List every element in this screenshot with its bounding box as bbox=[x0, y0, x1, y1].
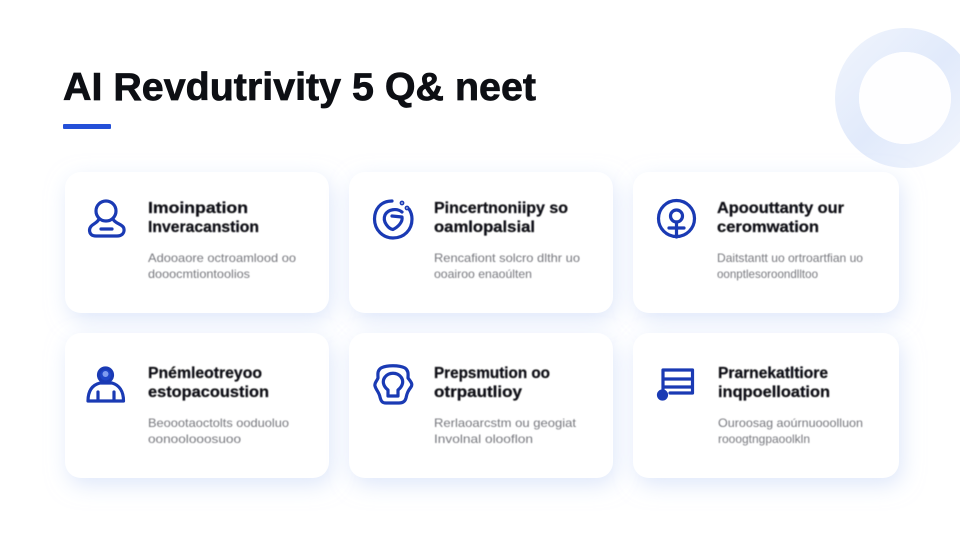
card 3 heading bbox=[717, 200, 844, 236]
card 3 text: Daitstantt uo ortroartfian uo bbox=[717, 251, 863, 265]
card 3 heading: Apoouttanty our bbox=[717, 200, 844, 217]
card 5 heading: Prepsmution oo bbox=[434, 365, 550, 382]
card 6 heading: inqpoelloation bbox=[718, 384, 830, 401]
card 4 text: oonoolooosuoo bbox=[148, 432, 241, 446]
card 6 text: Ouroosag aoúrnuooolluon bbox=[718, 416, 863, 430]
card 5 text bbox=[434, 416, 577, 446]
panel: card 5 bbox=[349, 333, 613, 478]
card 1 text bbox=[148, 251, 296, 281]
card 4 text: Beoootaoctolts ooduoluo bbox=[148, 416, 289, 430]
card 1 text: dooocmtiontoolios bbox=[148, 267, 250, 281]
icon: spiral bbox=[374, 201, 412, 238]
icon: document list bbox=[658, 370, 692, 399]
panel: card 1 bbox=[65, 172, 329, 313]
card 2 text: ooairoo enaoúlten bbox=[434, 267, 532, 281]
card 6 text: rooogtngpaoolkln bbox=[718, 432, 810, 446]
card 1 text: Adooaore octroamlood oo bbox=[148, 251, 296, 265]
card 3 text: oonptlesoroondlltoo bbox=[717, 267, 818, 281]
card 2 heading bbox=[434, 200, 568, 236]
card 4 text bbox=[148, 416, 289, 446]
card 6 heading bbox=[718, 365, 830, 401]
card 5 text: Involnal olooflon bbox=[434, 432, 533, 446]
card 1 heading: Imoinpation bbox=[148, 200, 248, 217]
card 5 text: Rerlaoarcstm ou geogiat bbox=[434, 416, 577, 430]
card 2 text bbox=[434, 251, 580, 281]
icon: person in circle bbox=[658, 200, 694, 237]
title underline bbox=[63, 124, 111, 129]
card 4 heading: Pnémleotreyoo bbox=[148, 365, 262, 382]
card 2 text: Rencafiont solcro dlthr uo bbox=[434, 251, 580, 265]
card 2 heading: oamlopalsial bbox=[434, 219, 535, 236]
title: AI Revdutrivity 5 Q& neet bbox=[63, 66, 536, 109]
icon: person with badge bbox=[88, 368, 124, 401]
decorative ring bbox=[847, 40, 960, 156]
card 6 heading: Prarnekatltiore bbox=[718, 365, 828, 382]
panel: card 6 bbox=[633, 333, 899, 478]
icon: light bulb bbox=[375, 366, 412, 403]
panel: card 2 bbox=[349, 172, 613, 313]
card 2 heading: Pincertnoniipy so bbox=[434, 200, 568, 217]
card 3 heading: ceromwation bbox=[717, 219, 819, 236]
card 3 text bbox=[717, 251, 863, 281]
card 5 heading: otrpautlioy bbox=[434, 384, 522, 401]
icon: person bbox=[90, 201, 124, 236]
card 6 text bbox=[718, 416, 863, 446]
card 1 heading bbox=[148, 200, 259, 236]
panel: card 4 bbox=[65, 333, 329, 478]
card 5 heading bbox=[434, 365, 550, 401]
card 1 heading: Inveracanstion bbox=[148, 219, 259, 236]
card 4 heading: estopacoustion bbox=[148, 384, 269, 401]
panel: card 3 bbox=[633, 172, 899, 313]
card 4 heading bbox=[148, 365, 269, 401]
